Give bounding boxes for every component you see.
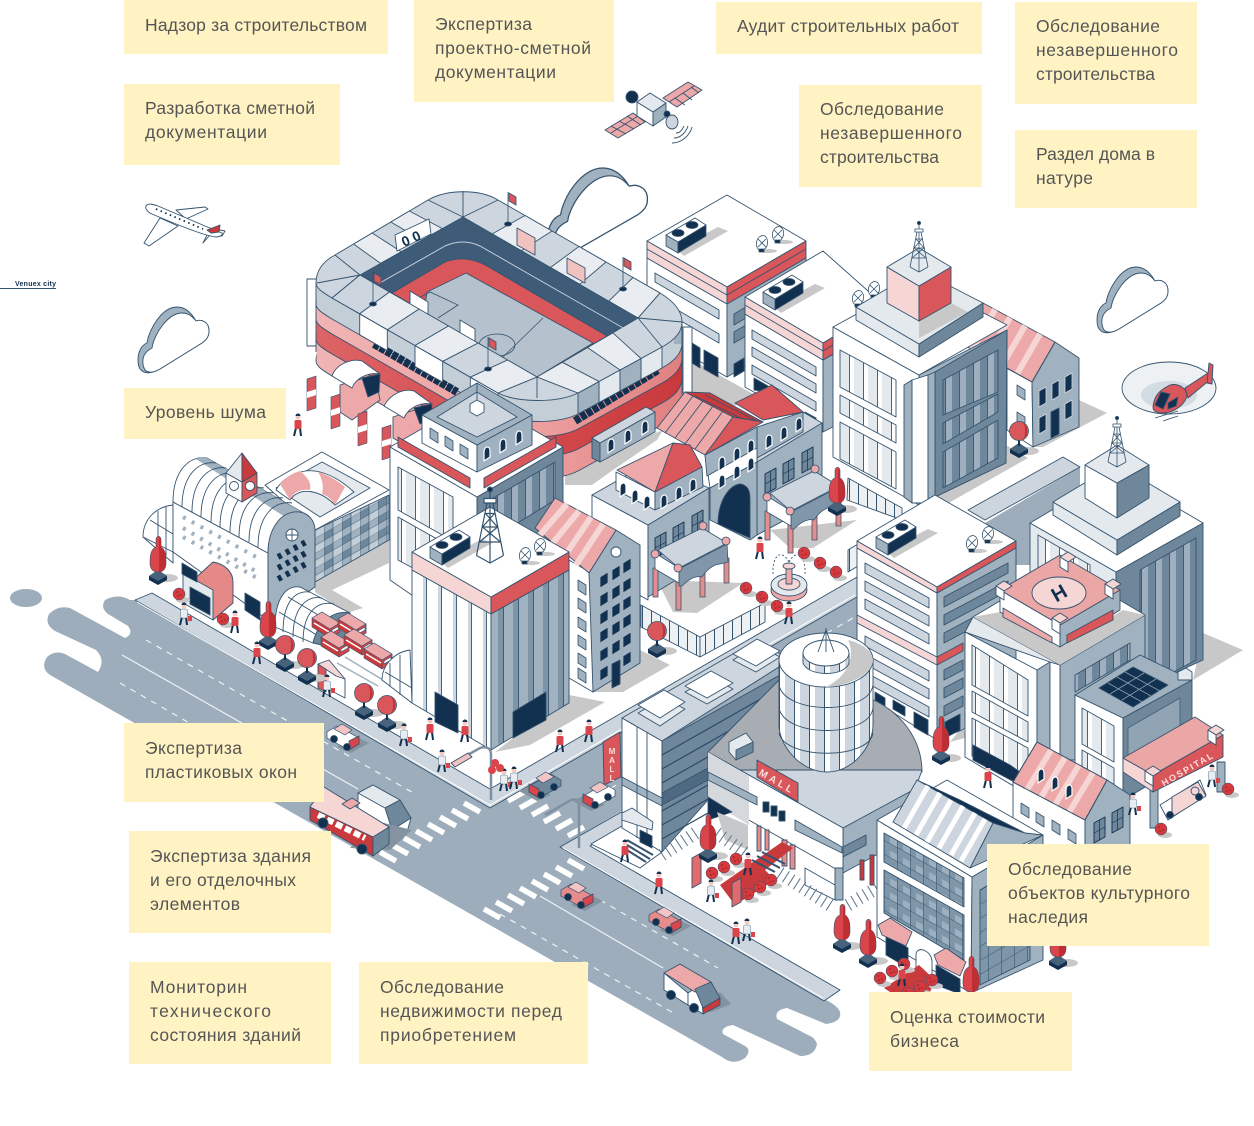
building G roof (390, 397, 563, 497)
station wall (173, 502, 268, 620)
mall columns (757, 826, 795, 869)
palace garden balls (740, 547, 847, 615)
crosswalks (380, 792, 584, 918)
road network (10, 457, 1080, 1062)
mall tree (699, 814, 728, 863)
garden fence (641, 603, 765, 657)
stadium entrance canopies (332, 360, 432, 445)
label: Оценка стоимости бизнеса: бизнеса (890, 1031, 959, 1051)
building G (390, 383, 563, 640)
plaza tall trees (833, 904, 1078, 1005)
helipad deck (1000, 555, 1120, 625)
side block with grid wall (265, 452, 389, 582)
mall dark round roof (708, 680, 922, 772)
stadium annex (592, 407, 655, 462)
helicopter tail (1185, 373, 1211, 398)
palace base windows (655, 532, 666, 558)
office J doors (875, 692, 960, 738)
label: Экспертиза проектно-сметной документации: документации (435, 62, 556, 82)
stadium top ring (316, 192, 682, 400)
front seating overlay (332, 275, 599, 393)
traffic light (455, 747, 579, 848)
palace main gate (718, 484, 750, 538)
brand caption: Venuex city (0, 281, 56, 289)
station small dome (143, 505, 173, 563)
label: Экспертиза пластиковых окон: Экспертиза (145, 738, 242, 758)
tower F (412, 487, 569, 750)
tower C roof (833, 280, 1007, 375)
brand caption: Venuex city: Venuex city (15, 281, 56, 288)
hospital legs (1150, 762, 1225, 828)
rear columns (860, 855, 874, 885)
label: Обследование незавершенного строительства (right) (1015, 2, 1197, 104)
label: Экспертиза проектно-сметной документации: проектно-сметной (435, 38, 591, 58)
palace (592, 385, 822, 600)
cloud left (138, 307, 209, 373)
station tree (149, 536, 178, 585)
ambulance (1160, 780, 1206, 820)
culture building parapet (877, 780, 1043, 877)
label: Мониторин технического состояния зданий: состояния зданий (150, 1025, 301, 1045)
office J left strips (865, 563, 929, 717)
label: Обследование незавершенного строительства (right): строительства (1036, 64, 1155, 84)
label: Мониторин технического состояния зданий: технического (150, 1001, 271, 1021)
hospital details (1129, 764, 1239, 838)
pitch markings (415, 292, 543, 357)
label: Обследование недвижимости перед приобретением: недвижимости перед (380, 1001, 562, 1021)
culture building glazing (884, 833, 964, 907)
apartment E roof (535, 498, 616, 573)
tree by office J (932, 716, 961, 765)
label: Экспертиза проектно-сметной документации (414, 0, 614, 102)
tower C tier (856, 307, 919, 357)
cars (327, 724, 691, 936)
label: Мониторин технического состояния зданий (129, 962, 331, 1064)
lane markings (120, 614, 860, 1015)
culture building roof (970, 823, 1043, 868)
train cars (312, 612, 392, 669)
stadium flags (370, 192, 631, 371)
rooftop AC unit (729, 733, 753, 760)
speaker panels (517, 228, 585, 283)
football pitch (424, 273, 593, 377)
building G walls (390, 447, 477, 640)
red carpet (720, 842, 793, 905)
entrance stairs (752, 852, 785, 872)
station (143, 453, 315, 620)
mall forecourt plate (591, 826, 662, 868)
ground shadows (315, 360, 1243, 752)
tree by house (1010, 422, 1039, 458)
roof main (685, 392, 763, 422)
stadium outer wall bands (316, 213, 682, 478)
label: Обследование незавершенного строительства (center): незавершенного (820, 123, 962, 143)
label: Мониторин технического состояния зданий: Мониторин (150, 977, 247, 997)
label: Экспертиза здания и его отделочных элементов: Экспертиза здания (150, 846, 311, 866)
label: Обследование объектов культурного наследия (987, 844, 1209, 946)
small tunnel (382, 650, 412, 703)
mall roof boxes (638, 639, 780, 726)
label: Обследование объектов культурного наследия: наследия (1008, 907, 1088, 927)
mat balls (874, 958, 943, 1002)
roof right wing (735, 385, 803, 420)
stadium running track (392, 259, 607, 377)
helipad building L: H (1048, 581, 1071, 607)
street trees (173, 588, 407, 732)
goals (410, 291, 475, 344)
label: Надзор за строительством: Надзор за строительством (145, 15, 367, 35)
label: Экспертиза здания и его отделочных элементов (129, 831, 331, 933)
building: office B (745, 251, 889, 432)
left wing (616, 472, 655, 510)
station roof (173, 458, 302, 553)
mall long block (591, 639, 790, 868)
mall corner leg (835, 868, 843, 900)
striped office J (857, 495, 1016, 740)
label: Обследование незавершенного строительства (center): строительства (820, 147, 939, 167)
small house D (960, 303, 1079, 447)
label: Оценка стоимости бизнеса (869, 992, 1072, 1071)
fountain (771, 555, 807, 601)
stadium wall cells (360, 314, 662, 414)
pink-roof house N (1013, 742, 1130, 880)
palace right wing wall (757, 412, 803, 458)
entrance banners (307, 376, 391, 460)
track (337, 657, 383, 686)
clock tower (226, 473, 242, 502)
tree by apartment (648, 622, 677, 658)
label: Уровень шума (124, 388, 286, 439)
mall banners (692, 853, 741, 907)
mall lower face (843, 790, 913, 873)
label: Обследование незавершенного строительства (right): незавершенного (1036, 40, 1178, 60)
rotor disc (1122, 362, 1216, 414)
roof left wing (617, 443, 673, 492)
pedestrians (180, 602, 992, 986)
tall tree near portico (828, 467, 857, 516)
vertical mall sign: L (610, 765, 615, 774)
label: Разработка сметной документации (124, 84, 340, 165)
plane (144, 204, 225, 246)
label: Обследование объектов культурного наследия: объектов культурного (1008, 883, 1190, 903)
porticos (651, 465, 842, 610)
glass vault (276, 471, 354, 505)
label: Экспертиза здания и его отделочных элементов: и его отделочных (150, 870, 296, 890)
stadium windows (374, 344, 658, 421)
tower C left window panels (840, 350, 896, 489)
office J right strips (944, 563, 1008, 716)
palace right base (757, 423, 822, 535)
far right tower K (1030, 416, 1203, 700)
tower F doors (435, 692, 458, 733)
office J bands (857, 615, 937, 665)
building G red trim (398, 437, 556, 488)
label: Раздел дома в натуре: Раздел дома в (1036, 144, 1155, 164)
vertical mall sign (603, 732, 621, 785)
sidewalk left (135, 577, 857, 808)
plaza hatched paths (662, 830, 877, 907)
tower C walls (833, 327, 919, 505)
label: Экспертиза пластиковых окон: пластиковых окон (145, 762, 297, 782)
plaza red mat (884, 965, 935, 992)
helicopter (1122, 362, 1216, 421)
label: Раздел дома в натуре: натуре (1036, 168, 1093, 188)
station window rows (183, 517, 258, 578)
label: Обследование незавершенного строительства (right): Обследование (1036, 16, 1160, 36)
blob (10, 589, 42, 607)
label: Аудит строительных работ: Аудит строительных работ (737, 16, 959, 36)
cylinder (779, 660, 873, 772)
kerb highlights (137, 595, 855, 998)
far pavement strip (968, 457, 1080, 520)
white truck (358, 785, 411, 833)
mall central: MALL (757, 768, 797, 797)
balloons (488, 759, 504, 774)
mall red sign (757, 760, 798, 802)
label: Разработка сметной документации: документации (145, 122, 267, 142)
stadium stands (360, 217, 638, 377)
person at stadium (294, 414, 302, 436)
helipad building L (965, 552, 1145, 800)
mall awning and steps (622, 808, 653, 830)
stadium (307, 191, 692, 478)
label: Раздел дома в натуре (1015, 130, 1197, 208)
cloud right (1097, 267, 1168, 333)
label: Обследование недвижимости перед приобретением: приобретением (380, 1025, 516, 1045)
label: Обследование недвижимости перед приобретением (359, 962, 588, 1064)
culture building shopfronts (886, 935, 960, 994)
vertical mall sign: L (610, 774, 615, 783)
rooftop house (422, 415, 477, 472)
helipad right side (1060, 590, 1120, 647)
label: Обследование незавершенного строительства (center): Обследование (820, 99, 944, 119)
mall central (708, 628, 922, 900)
sidewalk right (560, 810, 840, 1001)
far road segment (985, 467, 1080, 565)
label: Оценка стоимости бизнеса: Оценка стоимости (890, 1007, 1045, 1027)
side service panels (307, 279, 692, 393)
label: Надзор за строительством (124, 0, 388, 54)
palace central block (705, 427, 757, 488)
palace people (756, 536, 792, 624)
station portal (190, 562, 233, 620)
tunnel and train (275, 587, 412, 703)
label: Экспертиза здания и его отделочных элементов: элементов (150, 894, 240, 914)
apartment E (535, 498, 640, 692)
scoreboard (395, 219, 431, 251)
vertical mall sign: A (609, 756, 615, 765)
tower C (833, 221, 1007, 505)
satellite (605, 82, 702, 143)
palace base left wing (592, 495, 648, 600)
label: Экспертиза пластиковых окон (124, 723, 324, 802)
vertical mall sign: M (609, 747, 616, 756)
culture building O (877, 780, 1043, 994)
kiosk (318, 660, 345, 698)
mall light roof (708, 752, 922, 828)
tower C cube (887, 267, 919, 321)
mall underpass (708, 797, 732, 820)
label: Аудит строительных работ (716, 2, 982, 54)
house D roof (960, 303, 1055, 382)
helipad corners (996, 552, 1121, 634)
station gable (268, 512, 315, 620)
mall plaza balls (706, 853, 782, 903)
hospital canopy (1123, 717, 1225, 828)
apartment E windows (578, 558, 631, 683)
label: Обследование незавершенного строительства (center) (799, 85, 982, 187)
satellite panels (663, 82, 702, 107)
label: Разработка сметной документации: Разработка сметной (145, 98, 315, 118)
helipad left side (1000, 590, 1060, 647)
side fence (848, 544, 858, 572)
red bus (310, 787, 412, 856)
delivery van (664, 964, 731, 1014)
hospital sign text: HOSPITAL (1160, 750, 1216, 788)
solar panel (1099, 667, 1168, 707)
scoreboard: 0 0 (399, 227, 423, 250)
cloud behind stadium (548, 168, 647, 253)
helicopter body (1153, 385, 1187, 413)
street lamp banner (451, 753, 472, 767)
label: Обследование объектов культурного наследия: Обследование (1008, 859, 1132, 879)
solar building M (1075, 655, 1192, 820)
stadium light seating cells (317, 191, 682, 398)
label: Обследование недвижимости перед приобретением: Обследование (380, 977, 504, 997)
label: Экспертиза проектно-сметной документации: Экспертиза (435, 14, 532, 34)
label: Уровень шума: Уровень шума (145, 402, 266, 422)
building: back office A (647, 195, 806, 377)
road surface (44, 594, 860, 1062)
tower C right window panels (943, 350, 998, 488)
fence near tower C (847, 478, 902, 520)
